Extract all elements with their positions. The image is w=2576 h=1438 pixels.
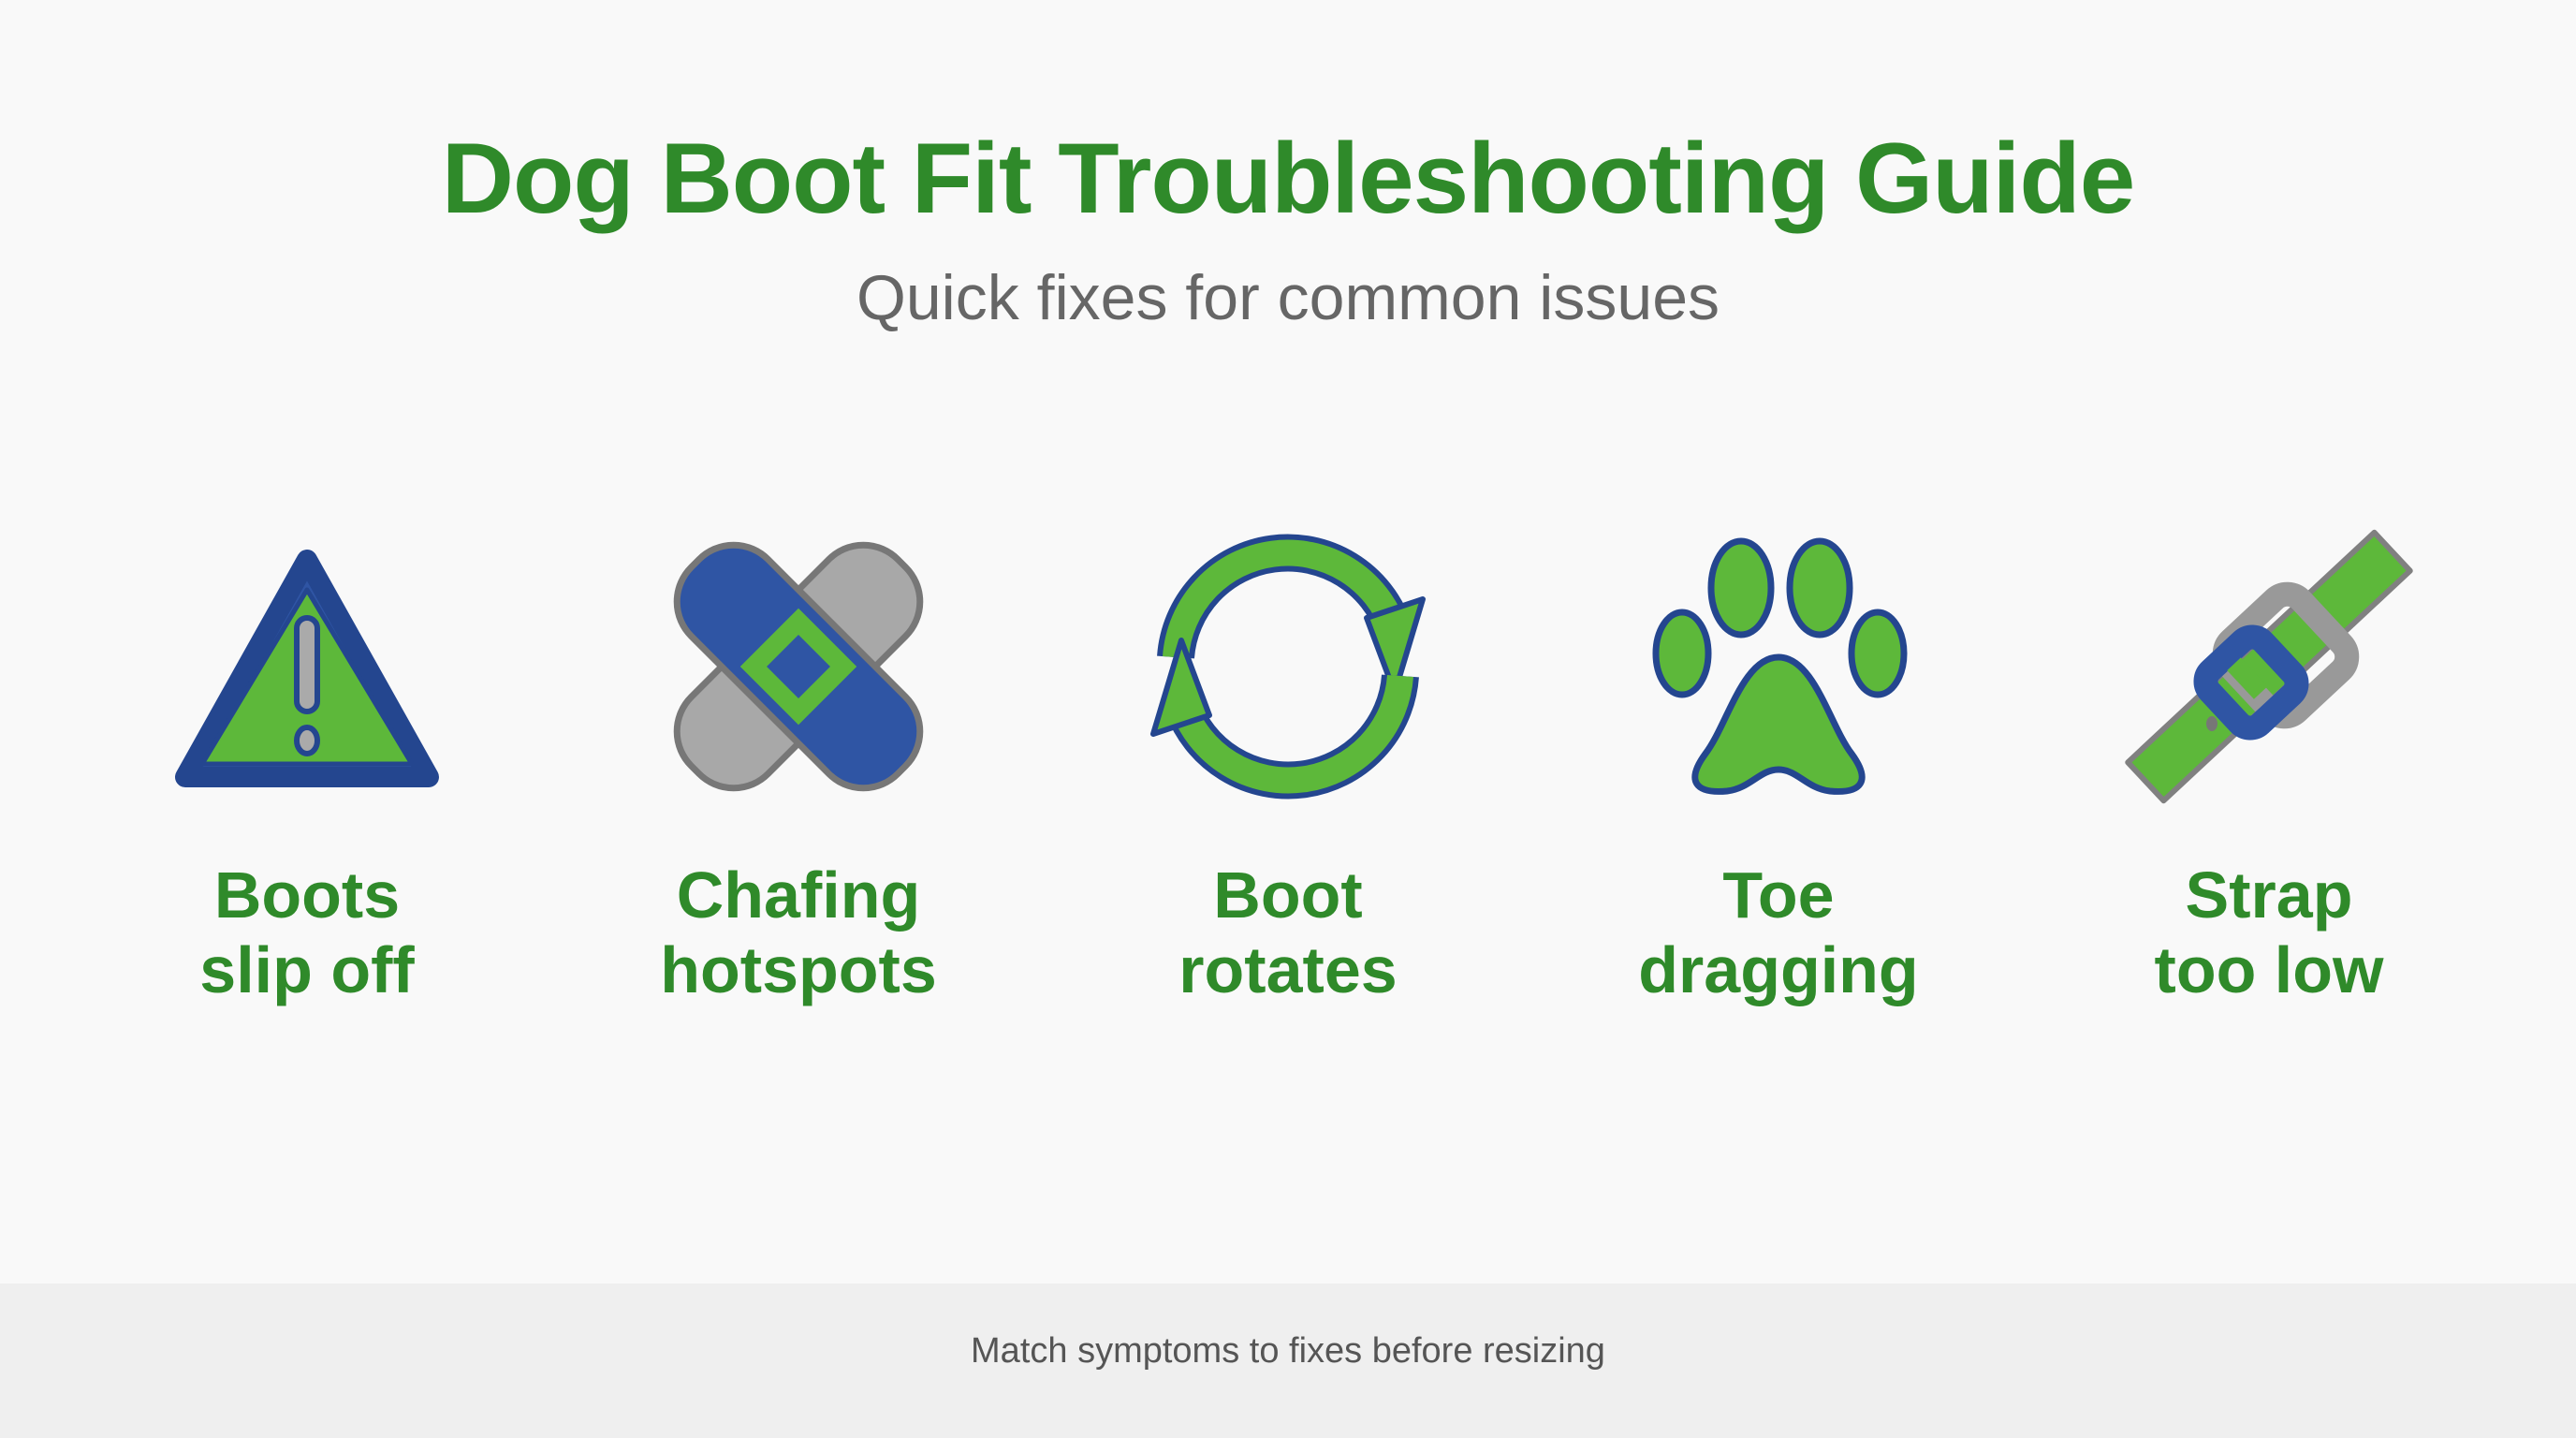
footer text: Match symptoms to fixes before resizing <box>971 1331 1605 1371</box>
label: toe dragging <box>1638 858 1919 1006</box>
title: Dog Boot Fit Troubleshooting Guide <box>442 122 2134 234</box>
label: boot rotates: Boot <box>1213 858 1363 932</box>
label: chafing hotspots: hotspots <box>660 933 937 1006</box>
label: toe dragging: Toe <box>1722 858 1835 932</box>
label: toe dragging: dragging <box>1638 933 1919 1006</box>
label: boot rotates: rotates <box>1178 933 1398 1006</box>
icon: strap buckle <box>2128 533 2410 800</box>
label: boots slip off: Boots <box>214 858 400 932</box>
label: strap too low: too low <box>2155 933 2383 1006</box>
icon: warning triangle <box>185 560 429 777</box>
icon: paw <box>1656 541 1904 791</box>
label: boots slip off <box>199 858 415 1006</box>
label: strap too low <box>2155 858 2384 1006</box>
label: boots slip off: slip off <box>199 933 415 1006</box>
label: boot rotates <box>1178 858 1398 1006</box>
footer band <box>0 1284 2576 1438</box>
icon: rotate arrows <box>1153 553 1423 780</box>
icon: bandage <box>657 525 940 808</box>
label: chafing hotspots <box>660 858 937 1006</box>
subtitle: Quick fixes for common issues <box>856 262 1720 333</box>
label: strap too low: Strap <box>2186 858 2352 932</box>
label: chafing hotspots: Chafing <box>677 858 920 932</box>
